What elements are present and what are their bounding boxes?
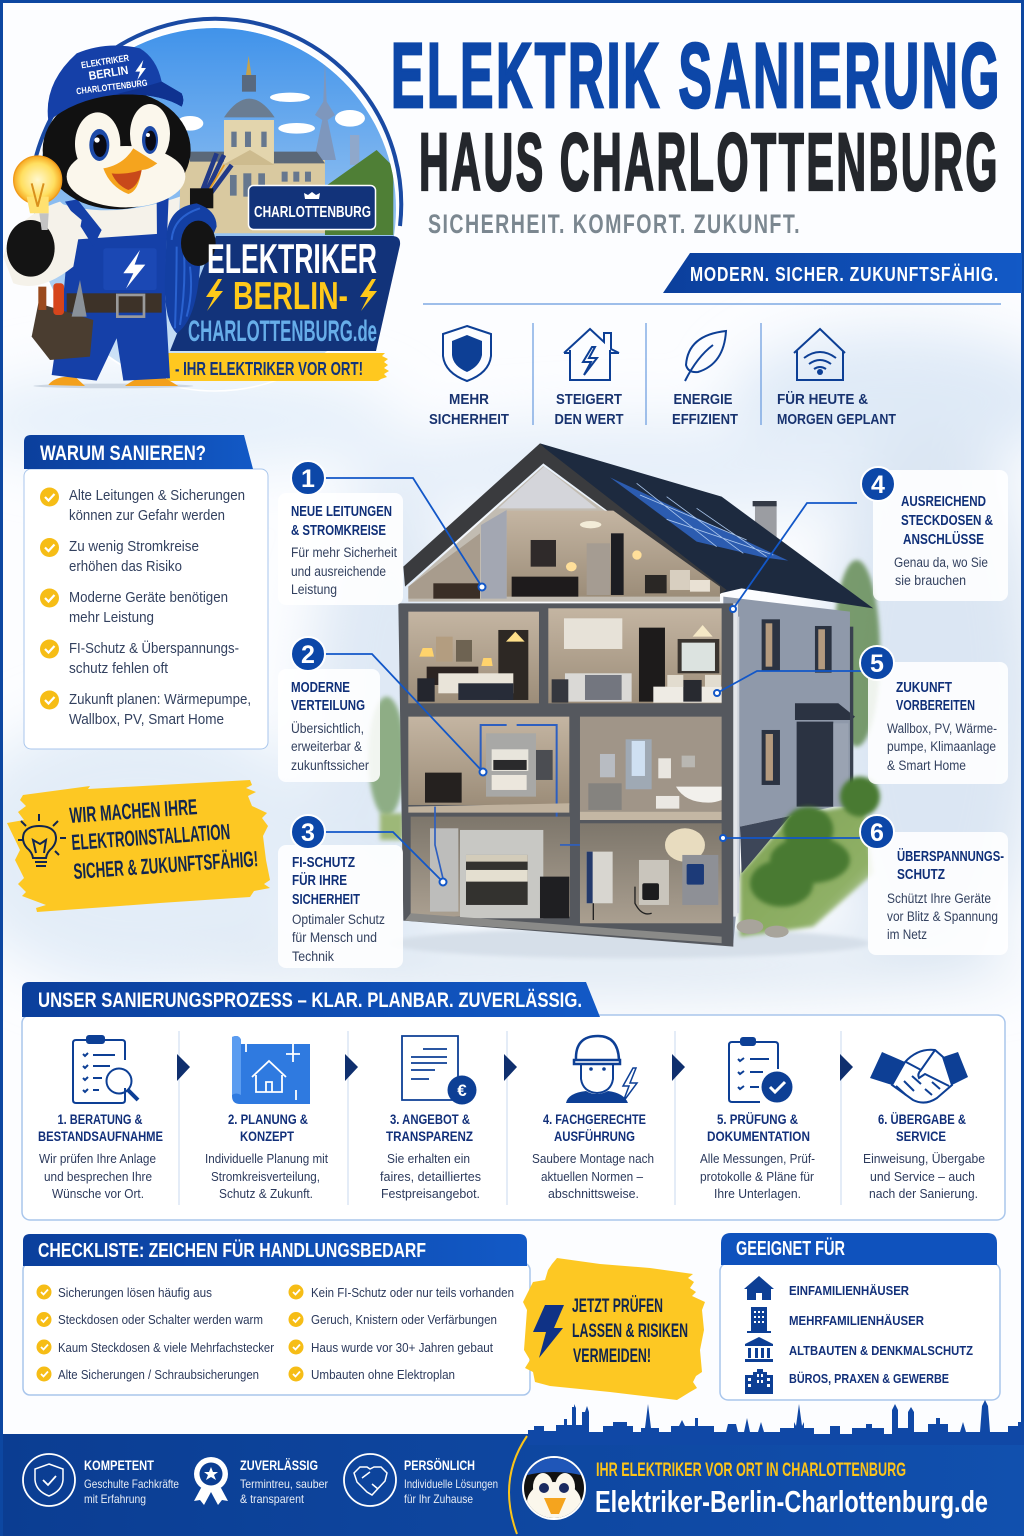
callout 5: 5: [870, 650, 884, 678]
step 2: 2. PLANUNG &: [228, 1112, 308, 1127]
trees and lawn: [368, 560, 880, 937]
badge: Kompetent: [23, 1454, 179, 1506]
panel: Checkliste: Kaum Steckdosen & viele Mehrfachstecker: [58, 1340, 275, 1355]
panel: Checkliste: Sicherungen lösen häufig aus: [58, 1285, 212, 1300]
callout 2: zukunftssicher: [291, 758, 369, 773]
icon: house: [744, 1276, 774, 1300]
badge: Zuverlässig: Termintreu, sauber: [240, 1477, 328, 1491]
panel: Warum sanieren: können zur Gefahr werden: [69, 507, 225, 524]
ribbon: [663, 253, 1022, 293]
icon: blueprint: [232, 1036, 310, 1104]
logo wordmark: BERLIN-: [233, 275, 348, 318]
benefit: Für heute und morgen geplant: MORGEN GEPLANT: [777, 412, 896, 428]
roof: [540, 443, 873, 608]
badge: Zuverlässig: [194, 1457, 328, 1506]
title: [391, 25, 1002, 208]
panel: Sanierungsprozess: [22, 982, 1005, 1220]
benefit: Mehr Sicherheit: MEHR: [449, 392, 489, 408]
bushes: [750, 777, 880, 907]
callout banner: Jetzt prüfen: VERMEIDEN!: [573, 1346, 651, 1367]
step 6: und Service – auch: [870, 1169, 975, 1184]
footer band: [3, 1400, 1024, 1536]
step 4: abschnittsweise.: [548, 1186, 639, 1201]
panel: Warum sanieren: Zukunft planen: Wärmepumpe,: [69, 691, 251, 708]
basement left: [411, 807, 598, 918]
process arrows: [177, 1054, 853, 1081]
step 1: [38, 1036, 163, 1201]
callout 4: [730, 467, 1008, 612]
callout 1: NEUE LEITUNGEN: [291, 504, 392, 520]
panel: Warum sanieren: erhöhen das Risiko: [69, 558, 182, 575]
slab and base: [405, 913, 722, 943]
callout banner: Jetzt prüfen: LASSEN & RISIKEN: [572, 1321, 688, 1342]
step 2: KONZEPT: [240, 1129, 295, 1144]
step 6: Einweisung, Übergabe: [863, 1151, 985, 1166]
callout 5: & Smart Home: [887, 758, 966, 773]
checklist heading: CHECKLISTE: ZEICHEN FÜR HANDLUNGSBEDARF: [38, 1239, 426, 1262]
callout 3: FI-SCHUTZ: [292, 855, 355, 871]
step 3: €: [457, 1081, 467, 1100]
panel: Geeignet für: ALTBAUTEN & DENKMALSCHUTZ: [789, 1343, 973, 1358]
right wall: [723, 597, 850, 943]
step 4: aktuellen Normen –: [541, 1169, 644, 1184]
logo panel background: [170, 236, 400, 351]
benefit: Mehr Sicherheit: SICHERHEIT: [429, 412, 509, 428]
icon: checklist with tick: [729, 1038, 778, 1102]
callout 5: [714, 646, 1008, 784]
badge scene: [34, 28, 396, 364]
panel: Checkliste: Geruch, Knistern oder Verfärbungen: [311, 1312, 497, 1327]
bedroom: [408, 612, 539, 703]
callout 4: AUSREICHEND: [901, 494, 986, 510]
step 2: [205, 1036, 328, 1201]
benefit: Für heute und morgen geplant: [777, 329, 896, 428]
callout 1: [278, 461, 486, 605]
sign: Charlottenburg: CHARLOTTENBURG: [254, 204, 371, 221]
step 5: Alle Messungen, Prüf-: [700, 1151, 815, 1166]
panel: Checkliste: Haus wurde vor 30+ Jahren gebaut: [311, 1340, 493, 1355]
callout banner: Wir machen: [7, 780, 270, 912]
callout 3: Optimaler Schutz: [292, 912, 385, 927]
yellow arc: [509, 1436, 527, 1534]
icon: handshake: [870, 1052, 968, 1085]
panel: Warum sanieren: Alte Leitungen & Sicherungen: [69, 487, 245, 504]
callout 5: ZUKUNFT: [896, 680, 952, 696]
icon: leaf: [685, 331, 726, 381]
callout 3: [278, 815, 446, 968]
panel: Warum sanieren: Moderne Geräte benötigen: [69, 589, 228, 606]
callout 3: FÜR IHRE: [292, 872, 347, 889]
callout 5: pumpe, Klimaanlage: [887, 739, 996, 754]
step 4: Saubere Montage nach: [532, 1151, 654, 1166]
step 4: AUSFÜHRUNG: [554, 1129, 635, 1144]
callout 6: SCHUTZ: [897, 867, 945, 883]
solar panel: [610, 477, 788, 561]
panel: Warum sanieren: mehr Leistung: [69, 609, 154, 626]
icon: offer document with euro: [402, 1036, 458, 1100]
icon: offices: [745, 1369, 773, 1394]
callout 6: Schützt Ihre Geräte: [887, 891, 991, 906]
mascot penguin: [3, 45, 232, 388]
icon: shield: [443, 326, 491, 381]
step 4: 4. FACHGERECHTE: [543, 1112, 646, 1127]
step 2: Individuelle Planung mit: [205, 1151, 328, 1166]
benefit: Energie effizient: EFFIZIENT: [672, 412, 738, 428]
checklist heading: [23, 1234, 527, 1266]
callout 4: STECKDOSEN &: [901, 513, 993, 529]
icon: light bulb: [18, 814, 66, 866]
panel heading: WARUM SANIEREN?: [40, 442, 206, 465]
icon: clipboard with magnifier: [73, 1036, 138, 1103]
callout 5: Wallbox, PV, Wärme-: [887, 721, 997, 736]
callout 2: 2: [301, 641, 315, 669]
windows: [762, 619, 855, 807]
benefit: Energie effizient: [672, 331, 738, 428]
callout 6: 6: [870, 819, 884, 847]
kitchen and living room: [548, 608, 722, 703]
step 3: 3. ANGEBOT &: [390, 1112, 470, 1127]
step 2: Stromkreisverteilung,: [211, 1169, 320, 1184]
badge ring: [33, 27, 397, 391]
badge: Persönlich: PERSÖNLICH: [404, 1458, 475, 1473]
icon: bolt: [533, 1305, 564, 1358]
mascot penguin: ELEKTRIKER: [80, 53, 130, 70]
benefit: Steigert den Wert: STEIGERT: [556, 392, 622, 408]
step 1: BESTANDSAUFNAHME: [38, 1129, 163, 1144]
callout 6: vor Blitz & Spannung: [887, 909, 998, 924]
step 6: SERVICE: [896, 1129, 946, 1144]
panel: Warum sanieren: schutz fehlen oft: [69, 660, 169, 677]
callout 2: MODERNE: [291, 680, 350, 696]
callout 4: sie brauchen: [895, 573, 966, 588]
callout banner: Jetzt prüfen: JETZT PRÜFEN: [572, 1296, 663, 1317]
logo slogan strip: [167, 353, 389, 381]
callout banner: Wir machen: ELEKTROINSTALLATION: [71, 819, 231, 855]
chimney: [755, 503, 777, 540]
icon: house with bolt: [564, 329, 619, 380]
panel: Checkliste: Alte Sicherungen / Schraubsicherungen: [58, 1367, 259, 1382]
callout 3: SICHERHEIT: [292, 892, 360, 908]
badge: Persönlich: [344, 1454, 498, 1506]
badge: Kompetent: mit Erfahrung: [84, 1492, 146, 1506]
benefit: Steigert den Wert: [554, 329, 624, 428]
step 5: 5. PRÜFUNG &: [717, 1112, 798, 1127]
logo wordmark: [175, 235, 377, 379]
callout 2: [278, 637, 486, 782]
skyline: [528, 1400, 1024, 1445]
callout banner: Wir machen: SICHER & ZUKUNFTSFÄHIG!: [73, 846, 259, 884]
cutaway house illustration: [368, 443, 880, 958]
callout 1: & STROMKREISE: [291, 523, 386, 539]
panel: Geeignet für: [720, 1233, 1000, 1400]
suitable heading: GEEIGNET FÜR: [736, 1237, 845, 1260]
callout 5: VORBEREITEN: [896, 698, 975, 714]
panel: Checkliste: Steckdosen oder Schalter werden warm: [58, 1312, 263, 1327]
step 6: [863, 1050, 985, 1201]
step 5: [700, 1038, 815, 1201]
callout 2: VERTEILUNG: [291, 698, 365, 714]
bathroom: [580, 717, 722, 820]
tagline: SICHERHEIT. KOMFORT. ZUKUNFT.: [428, 209, 801, 239]
panel: Warum sanieren: FI-Schutz & Überspannungs-: [69, 639, 239, 657]
mascot penguin: CHARLOTTENBURG: [76, 78, 148, 96]
basement right: [580, 823, 722, 923]
callout 2: erweiterbar &: [291, 739, 362, 754]
logo badge: [0, 19, 420, 391]
electrical distribution room: [408, 717, 569, 873]
step 1: Wünsche vor Ort.: [52, 1186, 144, 1201]
icon: smart home wifi: [794, 329, 845, 380]
concrete section: [398, 603, 733, 947]
callout 4: ANSCHLÜSSE: [903, 531, 984, 548]
logo wordmark: - IHR ELEKTRIKER VOR ORT!: [175, 359, 363, 379]
callout 1: Leistung: [291, 582, 337, 597]
icon: heritage building: [745, 1337, 773, 1362]
panel: Warum sanieren: [24, 435, 268, 749]
icon: electrician: [574, 1036, 620, 1064]
callout 3: 3: [301, 819, 315, 847]
suitable heading: [721, 1233, 997, 1265]
logo wordmark: ELEKTRIKER: [207, 235, 377, 282]
callout 1: 1: [301, 465, 315, 493]
callout banner: Jetzt prüfen: [523, 1258, 705, 1400]
attic: [408, 466, 720, 602]
sign: Charlottenburg: [248, 186, 376, 230]
step 2: Schutz & Zukunft.: [219, 1186, 313, 1201]
badge: Kompetent: KOMPETENT: [84, 1458, 155, 1473]
badge: Persönlich: für Ihr Zuhause: [404, 1492, 473, 1506]
benefit: Energie effizient: ENERGIE: [674, 392, 733, 408]
panel: Checkliste: [23, 1234, 530, 1395]
step 3: TRANSPARENZ: [386, 1129, 473, 1144]
icon: apartment: [747, 1307, 771, 1333]
step 4: [532, 1036, 654, 1201]
callout 1: und ausreichende: [291, 564, 386, 579]
callout 1: Für mehr Sicherheit: [291, 545, 397, 560]
badge: Zuverlässig: & transparent: [240, 1492, 305, 1506]
step 1: 1. BERATUNG &: [58, 1112, 143, 1127]
panel: Checkliste: Umbauten ohne Elektroplan: [311, 1367, 455, 1382]
step 1: Wir prüfen Ihre Anlage: [39, 1151, 156, 1166]
process heading: [22, 982, 600, 1017]
benefit: Für heute und morgen geplant: FÜR HEUTE &: [777, 391, 868, 408]
mascot penguin: BERLIN: [88, 63, 129, 83]
step 6: nach der Sanierung.: [869, 1186, 978, 1201]
panel: Warum sanieren: Wallbox, PV, Smart Home: [69, 711, 224, 728]
step 3: faires, detailliertes: [380, 1169, 481, 1184]
panel: Geeignet für: EINFAMILIENHÄUSER: [789, 1283, 910, 1298]
footer penguin: [522, 1456, 586, 1522]
step 3: Sie erhalten ein: [387, 1151, 470, 1166]
step 3: [380, 1036, 481, 1201]
panel: Checkliste: Kein FI-Schutz oder nur teils vorhanden: [311, 1285, 514, 1300]
callout 6: [720, 815, 1008, 955]
benefit: Steigert den Wert: DEN WERT: [554, 412, 624, 428]
badge: Persönlich: Individuelle Lösungen: [404, 1477, 498, 1491]
callout 4: Genau da, wo Sie: [894, 555, 988, 570]
panel: Geeignet für: MEHRFAMILIENHÄUSER: [789, 1313, 925, 1328]
callout 6: im Netz: [887, 927, 927, 942]
callout 4: 4: [871, 471, 885, 499]
step 6: 6. ÜBERGABE &: [878, 1112, 966, 1127]
badge: Zuverlässig: ZUVERLÄSSIG: [240, 1458, 318, 1473]
step 3: Festpreisangebot.: [381, 1186, 480, 1201]
panel heading: [24, 435, 253, 469]
step 5: DOKUMENTATION: [707, 1129, 810, 1144]
callout 2: Übersichtlich,: [291, 721, 364, 736]
logo wordmark: CHARLOTTENBURG.de: [188, 315, 377, 348]
panel: Geeignet für: BÜROS, PRAXEN & GEWERBE: [789, 1371, 949, 1386]
callout 3: für Mensch und: [292, 930, 377, 945]
step 5: Ihre Unterlagen.: [714, 1186, 801, 1201]
step 5: protokolle & Pläne für: [700, 1169, 815, 1184]
badge: Kompetent: Geschulte Fachkräfte: [84, 1477, 179, 1491]
background clouds: [0, 330, 1024, 995]
callout banner: Wir machen: WIR MACHEN IHRE: [69, 794, 198, 828]
process heading: UNSER SANIERUNGSPROZESS – KLAR. PLANBAR. ZUVERLÄSSIG.: [38, 989, 582, 1012]
callout 3: Technik: [292, 949, 334, 964]
step 1: und besprechen Ihre: [44, 1169, 152, 1184]
benefit: Mehr Sicherheit: [429, 326, 509, 428]
panel: Warum sanieren: Zu wenig Stromkreise: [69, 538, 199, 555]
